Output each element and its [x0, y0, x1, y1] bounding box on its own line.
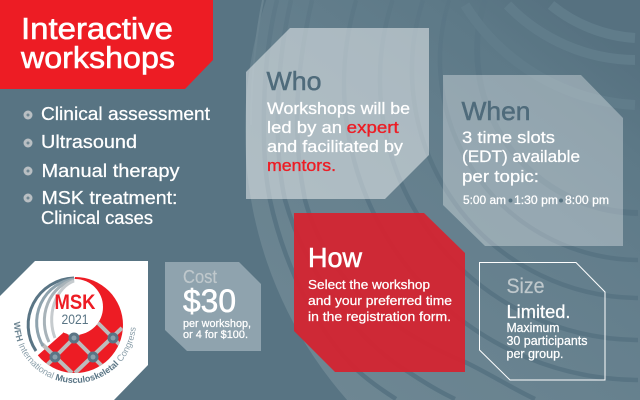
panel: size: Limited. [506, 302, 570, 322]
panel: when: 1:30 pm [514, 195, 558, 207]
panel: who: Workshops will be [267, 100, 410, 118]
logo: MSK 2021: WFH International Musculoskeletal Congress [14, 322, 136, 384]
panel: who: and facilitated by [267, 138, 404, 156]
panel: how: How [308, 242, 363, 273]
topic list: Manual therapy [42, 161, 180, 181]
panel: when [443, 75, 623, 246]
panel: size: per group. [506, 347, 564, 361]
panel: size: Maximum [506, 321, 560, 335]
topic list: Ultrasound [41, 132, 137, 152]
panel: when: 8:00 pm [565, 195, 609, 207]
panel: who: led by an [267, 119, 342, 137]
panel: who: mentors. [267, 157, 336, 175]
panel: when: 5:00 am [463, 195, 506, 207]
panel: cost [165, 262, 261, 351]
topic list: MSK treatment: [42, 188, 178, 208]
panel: how [294, 213, 465, 372]
panel: who [246, 28, 429, 199]
topic list: Clinical assessment [41, 104, 210, 124]
panel: size [480, 262, 605, 380]
title panel: workshops [20, 40, 175, 75]
panel: how: in the registration form. [308, 309, 451, 324]
topic list: Clinical cases [41, 208, 153, 228]
panel: when: per topic: [462, 168, 539, 186]
panel: who: Who [266, 66, 322, 96]
panel: cost: $30 [183, 283, 236, 319]
panel: how: and your preferred time [308, 293, 452, 308]
panel: size: 30 participants [506, 334, 588, 348]
panel: who: expert [347, 119, 399, 137]
logo: MSK 2021: MSK [54, 291, 96, 314]
title panel: Interactive [21, 11, 173, 46]
panel: cost: per workshop, [183, 318, 251, 330]
panel: cost: or 4 for $100. [183, 329, 248, 341]
topic list [24, 104, 210, 228]
panel: when: (EDT) available [462, 148, 580, 166]
panel: how: Select the workshop [308, 277, 430, 292]
panel: size: Size [506, 275, 544, 298]
logo: MSK 2021: 2021 [62, 311, 89, 327]
logo: MSK 2021 [0, 261, 148, 400]
panel: when: When [462, 96, 530, 126]
panel: cost: Cost [183, 267, 217, 287]
panel: when: 3 time slots [462, 129, 555, 147]
title panel [0, 0, 213, 89]
